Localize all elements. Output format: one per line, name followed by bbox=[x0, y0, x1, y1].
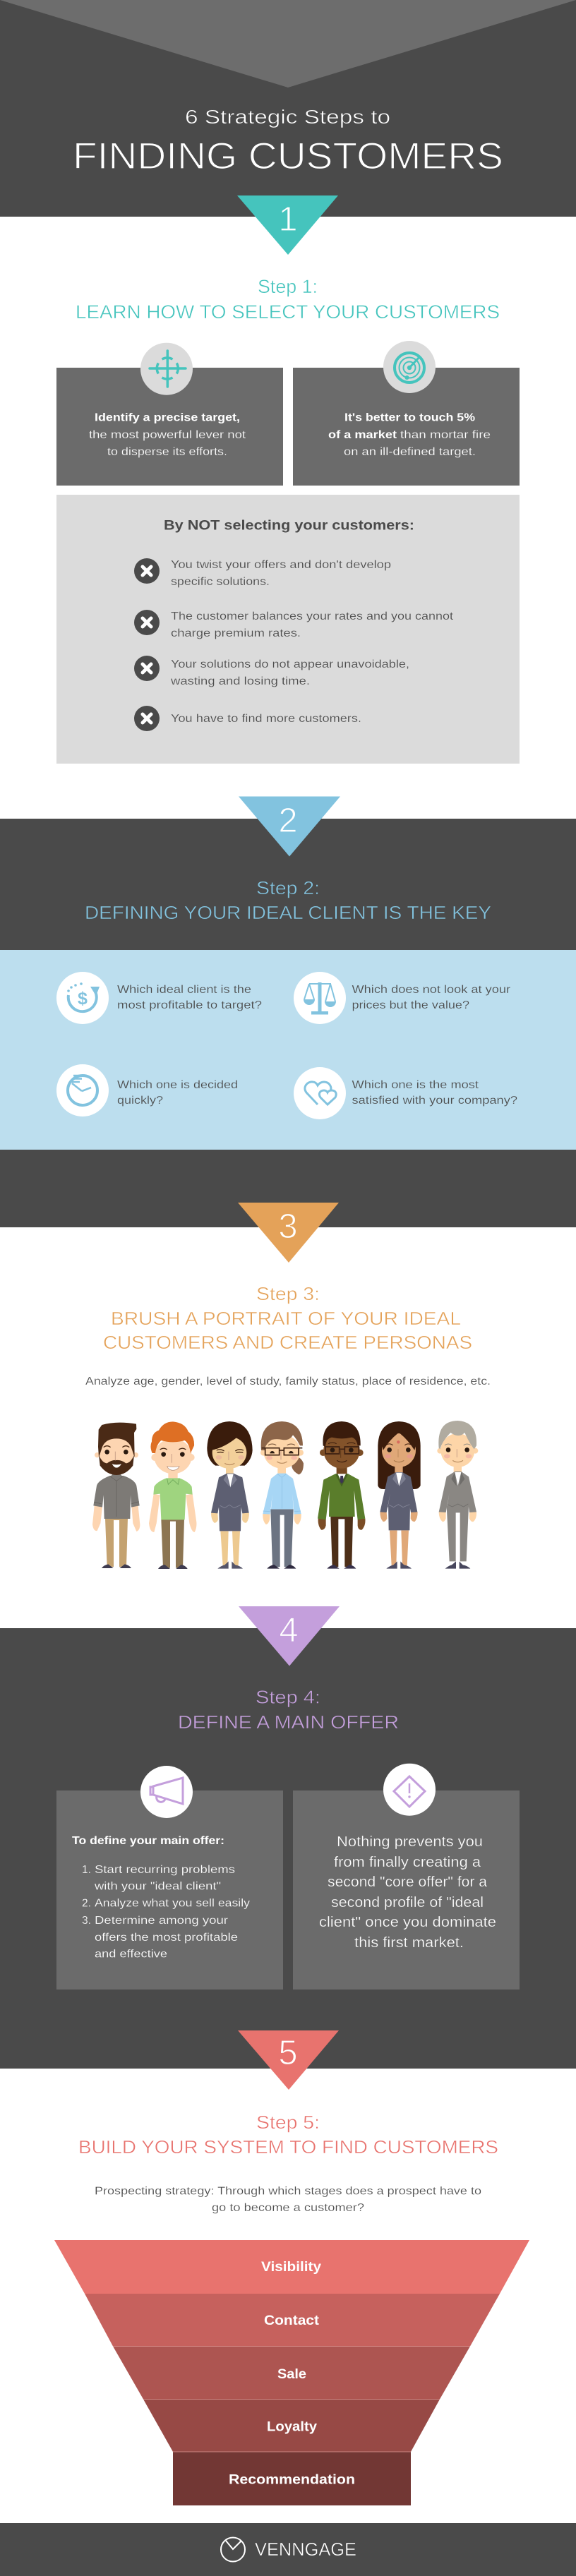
funnel: loyalty bbox=[143, 2400, 440, 2452]
card: main offer list: 1. bbox=[82, 1864, 91, 1876]
brand name: VENNGAGE bbox=[255, 2539, 356, 2560]
persona: ginger man bbox=[149, 1421, 196, 1569]
card: precise target: the most powerful lever not bbox=[89, 429, 246, 441]
step 4 number triangle: 4 bbox=[279, 1611, 299, 1649]
icon: dollar cycle: $ bbox=[78, 989, 88, 1009]
step 4 heading: Step 4: bbox=[256, 1687, 320, 1708]
icon: megaphone bbox=[140, 1766, 193, 1818]
icon: hearts bbox=[294, 1067, 346, 1119]
item 4 bbox=[134, 706, 361, 731]
title: FINDING CUSTOMERS bbox=[73, 136, 503, 177]
step 3 heading: CUSTOMERS AND CREATE PERSONAS bbox=[103, 1332, 472, 1353]
card: precise target: Identify a precise target, bbox=[95, 412, 240, 423]
step 4 number triangle bbox=[239, 1606, 340, 1666]
icon: scales bbox=[294, 972, 346, 1024]
question 4 bbox=[352, 1079, 517, 1107]
card: second offer note: from finally creating a bbox=[334, 1855, 481, 1870]
step 5 heading bbox=[78, 2112, 498, 2157]
question 3 bbox=[117, 1079, 238, 1107]
funnel chart bbox=[54, 2240, 529, 2505]
step 3 number triangle: 3 bbox=[278, 1208, 298, 1246]
card: main offer list: Analyze what you sell easily bbox=[95, 1898, 250, 1910]
card: precise target: to disperse its efforts. bbox=[107, 446, 227, 458]
step 1 number triangle: 1 bbox=[278, 200, 298, 239]
question 1: most profitable to target? bbox=[117, 999, 262, 1011]
card: main offer list: To define your main offer: bbox=[72, 1835, 224, 1847]
funnel: visibility: Visibility bbox=[261, 2260, 321, 2275]
personas illustration bbox=[92, 1421, 478, 1569]
question 4: satisfied with your company? bbox=[352, 1095, 517, 1107]
card: main offer list: Start recurring problems bbox=[95, 1864, 235, 1876]
item 1 bbox=[134, 558, 391, 588]
item 3: wasting and losing time. bbox=[170, 675, 310, 687]
item 2: The customer balances your rates and you cannot bbox=[171, 610, 454, 622]
step 3 heading: Step 3: bbox=[256, 1283, 320, 1304]
panel heading: By NOT selecting your customers: bbox=[164, 518, 414, 534]
card: touch 5 percent: on an ill-defined target. bbox=[344, 446, 476, 458]
step 5 description: go to become a customer? bbox=[212, 2202, 364, 2214]
funnel: visibility bbox=[54, 2240, 529, 2294]
card: touch 5 percent bbox=[293, 368, 520, 486]
step 2 number triangle bbox=[239, 796, 340, 857]
item 1: specific solutions. bbox=[171, 576, 270, 588]
icon: venngage logo bbox=[221, 2538, 245, 2562]
item 2 bbox=[134, 610, 454, 639]
icon: warning diamond bbox=[383, 1764, 436, 1816]
item 3 bbox=[134, 656, 409, 687]
question 4: Which one is the most bbox=[352, 1079, 479, 1091]
step 1 number triangle bbox=[237, 195, 338, 255]
item 4: You have to find more customers. bbox=[171, 713, 361, 725]
item 3: Your solutions do not appear unavoidable, bbox=[171, 658, 409, 670]
persona: bearded man bbox=[92, 1423, 140, 1568]
panel: header bbox=[0, 0, 576, 217]
step 5 heading: BUILD YOUR SYSTEM TO FIND CUSTOMERS bbox=[78, 2136, 498, 2157]
card: main offer list: and effective bbox=[95, 1949, 167, 1961]
card: second offer note bbox=[293, 1790, 520, 1990]
step 2 heading bbox=[85, 877, 491, 923]
icon: dollar cycle bbox=[56, 972, 109, 1024]
funnel: contact: Contact bbox=[264, 2313, 320, 2328]
step 3 description: Analyze age, gender, level of study, family status, place of residence, etc. bbox=[85, 1376, 491, 1388]
panel: step 5 bbox=[0, 2030, 576, 2523]
card: second offer note: client" once you dominate bbox=[319, 1915, 496, 1930]
persona: man in green sweater bbox=[318, 1421, 365, 1569]
step 1 heading bbox=[76, 276, 500, 323]
question 1 bbox=[117, 984, 262, 1011]
subtitle: 6 Strategic Steps to bbox=[185, 106, 390, 128]
panel: questions bbox=[0, 950, 576, 1150]
persona: woman with bob bbox=[207, 1421, 253, 1569]
step 3 heading bbox=[103, 1283, 472, 1353]
card: second offer note: second profile of "ideal bbox=[331, 1895, 484, 1910]
step 5 description: Prospecting strategy: Through which stages does a prospect have to bbox=[95, 2185, 481, 2198]
funnel: sale: Sale bbox=[277, 2367, 306, 2382]
funnel: contact bbox=[85, 2294, 500, 2346]
icon: clock bbox=[56, 1064, 109, 1117]
step 1 heading: LEARN HOW TO SELECT YOUR CUSTOMERS bbox=[76, 301, 500, 323]
card: second offer note: Nothing prevents you bbox=[337, 1834, 483, 1850]
persona: woman with grey hair bbox=[437, 1421, 478, 1569]
panel: by not selecting bbox=[56, 495, 520, 764]
card: touch 5 percent: of a market bbox=[328, 429, 397, 441]
card: main offer list: with your "ideal client" bbox=[94, 1881, 221, 1893]
funnel: sale bbox=[113, 2346, 470, 2400]
item 2: charge premium rates. bbox=[171, 627, 301, 639]
card: touch 5 percent: than mortar fire bbox=[400, 429, 491, 441]
question 1: Which ideal client is the bbox=[117, 984, 251, 996]
question 2: Which does not look at your bbox=[352, 984, 511, 996]
card: main offer list: offers the most profitable bbox=[95, 1932, 238, 1944]
panel: step 4 bbox=[0, 1606, 576, 2069]
step 5 heading: Step 5: bbox=[256, 2112, 320, 2133]
funnel: recommendation: Recommendation bbox=[229, 2473, 355, 2487]
card: main offer list: 3. bbox=[82, 1915, 91, 1927]
funnel: loyalty: Loyalty bbox=[267, 2419, 317, 2435]
card: second offer note: this first market. bbox=[354, 1935, 464, 1951]
step 3 heading: BRUSH A PORTRAIT OF YOUR IDEAL bbox=[111, 1308, 461, 1329]
panel: step 1 bbox=[0, 195, 576, 819]
question 2: prices but the value? bbox=[352, 999, 469, 1011]
card: main offer list bbox=[56, 1790, 283, 1990]
step 4 heading: DEFINE A MAIN OFFER bbox=[178, 1711, 399, 1733]
item 1: You twist your offers and don't develop bbox=[171, 559, 391, 571]
step 3 number triangle bbox=[238, 1203, 339, 1263]
panel: step 3 bbox=[0, 1203, 576, 1628]
top chevron bbox=[0, 0, 576, 88]
card: second offer note: second "core offer" for a bbox=[328, 1874, 488, 1890]
step 5 number triangle bbox=[238, 2030, 339, 2090]
question 3: quickly? bbox=[117, 1095, 163, 1107]
step 2 heading: Step 2: bbox=[256, 877, 320, 898]
persona: woman with glasses bbox=[260, 1421, 304, 1569]
card: main offer list: 2. bbox=[82, 1898, 91, 1910]
card: precise target bbox=[56, 368, 283, 486]
step 2 heading: DEFINING YOUR IDEAL CLIENT IS THE KEY bbox=[85, 902, 491, 923]
step 4 heading bbox=[178, 1687, 399, 1733]
card: touch 5 percent: It's better to touch 5% bbox=[344, 412, 475, 423]
step 5 number triangle: 5 bbox=[278, 2034, 298, 2072]
icon: radar bbox=[383, 341, 436, 393]
step 5 description bbox=[95, 2185, 481, 2214]
footer bbox=[0, 2523, 576, 2576]
persona: woman with long hair bbox=[378, 1421, 421, 1569]
panel: step 2 bbox=[0, 796, 576, 1227]
question 3: Which one is decided bbox=[117, 1079, 238, 1091]
funnel: recommendation bbox=[173, 2452, 411, 2505]
step 1 heading: Step 1: bbox=[258, 276, 318, 297]
icon: crosshair bbox=[140, 343, 193, 395]
step 2 number triangle: 2 bbox=[278, 802, 298, 840]
card: main offer list: Determine among your bbox=[95, 1915, 229, 1927]
question 2 bbox=[352, 984, 511, 1011]
